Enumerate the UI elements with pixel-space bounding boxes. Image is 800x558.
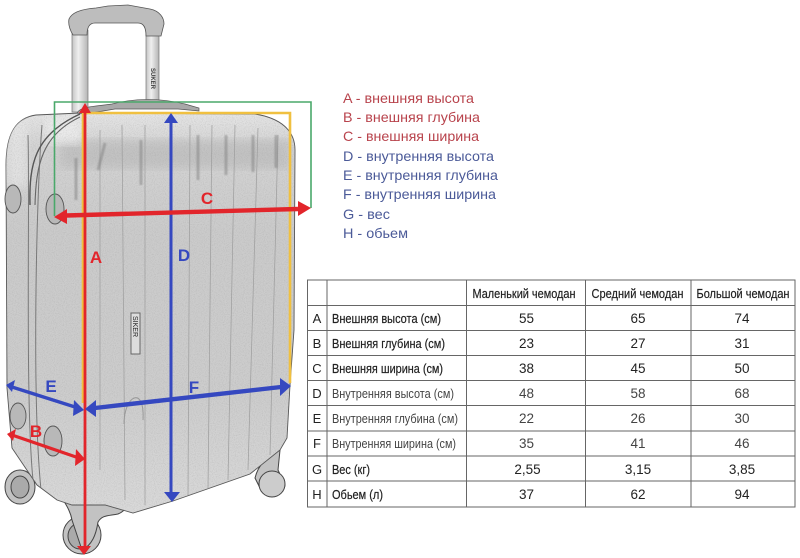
small suitcase values: 48 <box>519 386 534 401</box>
large suitcase values: 46 <box>734 436 750 451</box>
small suitcase values: 2,55 <box>514 462 541 477</box>
large suitcase values <box>729 311 755 502</box>
row letters: A <box>313 311 322 326</box>
suitcase shell <box>6 113 295 513</box>
legend: C - внешняя ширина <box>343 128 479 144</box>
row names: outer dimensions, weight, volume: Внешняя высота (см) <box>332 312 441 326</box>
legend: A - внешняя высота <box>343 90 474 106</box>
legend: G - вес <box>343 206 390 222</box>
row letters: C <box>312 361 322 376</box>
legend: D - внутренняя высота <box>343 148 494 164</box>
arrow labels: A <box>90 248 102 267</box>
legend: B - внешняя глубина <box>343 109 480 125</box>
row names: outer dimensions, weight, volume <box>332 312 445 502</box>
table header: Средний чемодан <box>592 287 684 301</box>
large suitcase values: 94 <box>734 487 750 502</box>
legend: H - обьем <box>343 225 408 241</box>
telescopic handle <box>69 5 164 112</box>
legend: E - внутренняя глубина <box>343 167 498 183</box>
arrow: D inner height <box>164 113 180 502</box>
large suitcase values: 50 <box>734 361 750 376</box>
medium suitcase values: 3,15 <box>625 462 651 477</box>
arrow: C outer width <box>54 201 311 224</box>
top carry handle <box>77 100 199 114</box>
medium suitcase values: 27 <box>630 336 646 351</box>
row names: outer dimensions, weight, volume: Вес (кг) <box>332 463 370 477</box>
table header <box>472 287 790 301</box>
brand badge: SIKER <box>131 316 138 337</box>
front lower pocket mark <box>124 398 143 424</box>
side bumpers <box>5 185 64 456</box>
small suitcase values: 38 <box>519 361 534 376</box>
row names: inner dimensions <box>332 387 458 451</box>
small suitcase values: 55 <box>519 311 534 326</box>
row names: outer dimensions, weight, volume: Обьем (л) <box>332 488 383 502</box>
arrow: F inner width <box>85 378 291 417</box>
legend: F - внутренняя ширина <box>343 186 496 202</box>
large suitcase values: 68 <box>734 386 750 401</box>
table header: Большой чемодан <box>696 287 790 301</box>
yellow frame: inner dimensions <box>83 113 290 403</box>
row letters: G <box>312 462 322 477</box>
medium suitcase values: 58 <box>630 386 646 401</box>
arrow labels: C <box>201 189 213 208</box>
row letters: E <box>313 411 322 426</box>
back shell zipper <box>30 114 80 205</box>
row letters: H <box>312 487 322 502</box>
icon: suitcase illustration <box>0 5 300 554</box>
medium suitcase values: 41 <box>630 436 646 451</box>
large suitcase values: 31 <box>734 336 750 351</box>
row names: inner dimensions: Внутренняя высота (см) <box>332 387 454 401</box>
row letters: B <box>313 336 321 351</box>
row names: inner dimensions: Внутренняя ширина (см) <box>332 437 456 451</box>
large suitcase values: 3,85 <box>729 462 755 477</box>
table grid <box>308 280 795 507</box>
arrow: E inner depth <box>6 380 84 416</box>
medium suitcase values: 26 <box>630 411 646 426</box>
suitcase wheels <box>5 450 285 554</box>
row names: outer dimensions, weight, volume: Внешняя глубина (см) <box>332 337 445 351</box>
row names: outer dimensions, weight, volume: Внешняя ширина (см) <box>332 362 443 376</box>
row letters: D <box>312 386 322 401</box>
small suitcase values: 37 <box>519 487 534 502</box>
brand badge <box>131 313 140 354</box>
green frame: outer dimensions <box>54 102 311 216</box>
legend <box>343 90 498 241</box>
table header: Маленький чемодан <box>472 287 576 301</box>
medium suitcase values: 45 <box>630 361 646 376</box>
arrow: B outer depth <box>7 429 85 466</box>
large suitcase values: 30 <box>734 411 750 426</box>
arrow labels: B <box>30 422 42 441</box>
medium suitcase values <box>625 311 651 502</box>
small suitcase values: 35 <box>519 436 534 451</box>
arrow labels <box>30 189 213 441</box>
small suitcase values: 22 <box>519 411 534 426</box>
arrow labels: E <box>45 377 57 396</box>
small suitcase values: 23 <box>519 336 534 351</box>
small suitcase values <box>514 311 541 502</box>
telescopic handle: SUKER <box>149 68 155 90</box>
arrow labels: F <box>189 378 199 397</box>
medium suitcase values: 62 <box>630 487 646 502</box>
large suitcase values: 74 <box>734 311 750 326</box>
row names: inner dimensions: Внутренняя глубина (см) <box>332 412 458 426</box>
row letters <box>312 311 322 502</box>
row letters: F <box>313 436 321 451</box>
suitcase ribs and shading <box>0 100 300 520</box>
arrow labels: D <box>178 246 190 265</box>
table: suitcase sizes <box>308 280 795 507</box>
arrow: A outer height <box>77 103 91 555</box>
medium suitcase values: 65 <box>630 311 646 326</box>
